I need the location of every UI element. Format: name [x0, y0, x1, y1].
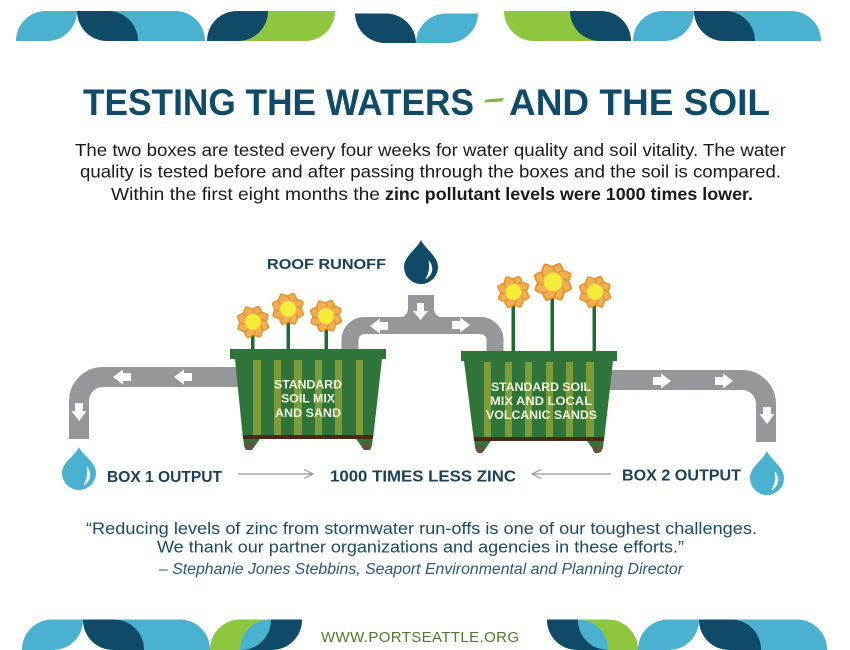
intro text block: zinc pollutant levels were 1000 times lower. — [385, 184, 753, 204]
icon: box 2 output drop — [750, 451, 784, 495]
top decorative banner — [16, 11, 821, 43]
quote: “Reducing levels of zinc from stormwater run-offs is one of our toughest challenges. — [86, 520, 757, 538]
pipe: roof runoff split — [350, 295, 495, 352]
intro text block: The two boxes are tested every four weeks for water quality and soil vitality. The water — [75, 140, 786, 160]
box 2 label: MIX AND LOCAL — [490, 396, 592, 408]
quote: We thank our partner organizations and agencies in these efforts.” — [157, 538, 684, 556]
icon: roof runoff drop — [404, 240, 438, 284]
title: TESTING THE WATERS — [83, 81, 474, 123]
bottom decorative banner left — [22, 619, 302, 650]
pipe arrows — [72, 303, 774, 424]
pipe: box 2 output — [606, 380, 766, 442]
box 1 planter — [230, 320, 386, 450]
icon: box 1 output drop — [62, 447, 96, 490]
label: roof runoff: ROOF RUNOFF — [267, 257, 386, 273]
intro text block — [75, 140, 786, 204]
pipe: box 1 output — [79, 377, 240, 439]
box 2 label: STANDARD SOIL — [491, 382, 591, 394]
title: AND THE SOIL — [509, 81, 770, 123]
box 1 label: AND SAND — [275, 408, 341, 420]
label: 1000 times less zinc: 1000 TIMES LESS ZINC — [330, 468, 516, 486]
title — [83, 81, 770, 123]
intro text block: quality is tested before and after passing through the boxes and the soil is compared. — [80, 162, 781, 182]
intro text block: Within the first eight months the — [111, 184, 380, 204]
quote — [86, 520, 757, 578]
box 2 label — [486, 382, 597, 422]
box 1 label: SOIL MIX — [281, 394, 335, 406]
bottom decorative banner right — [547, 619, 827, 650]
flowers — [232, 257, 616, 343]
label: box 1 output: BOX 1 OUTPUT — [107, 469, 223, 486]
arrow: box 1 to result — [238, 470, 313, 478]
box 2 planter — [461, 298, 617, 453]
label: box 2 output: BOX 2 OUTPUT — [622, 468, 742, 484]
box 1 label — [274, 380, 342, 420]
quote: – Stephanie Jones Stebbins, Seaport Environmental and Planning Director — [158, 561, 684, 578]
box 2 label: VOLCANIC SANDS — [486, 410, 597, 422]
website url: WWW.PORTSEATTLE.ORG — [321, 629, 519, 646]
feet — [243, 436, 262, 450]
box 1 label: STANDARD — [274, 380, 342, 392]
arrow: box 2 to result — [532, 470, 611, 478]
